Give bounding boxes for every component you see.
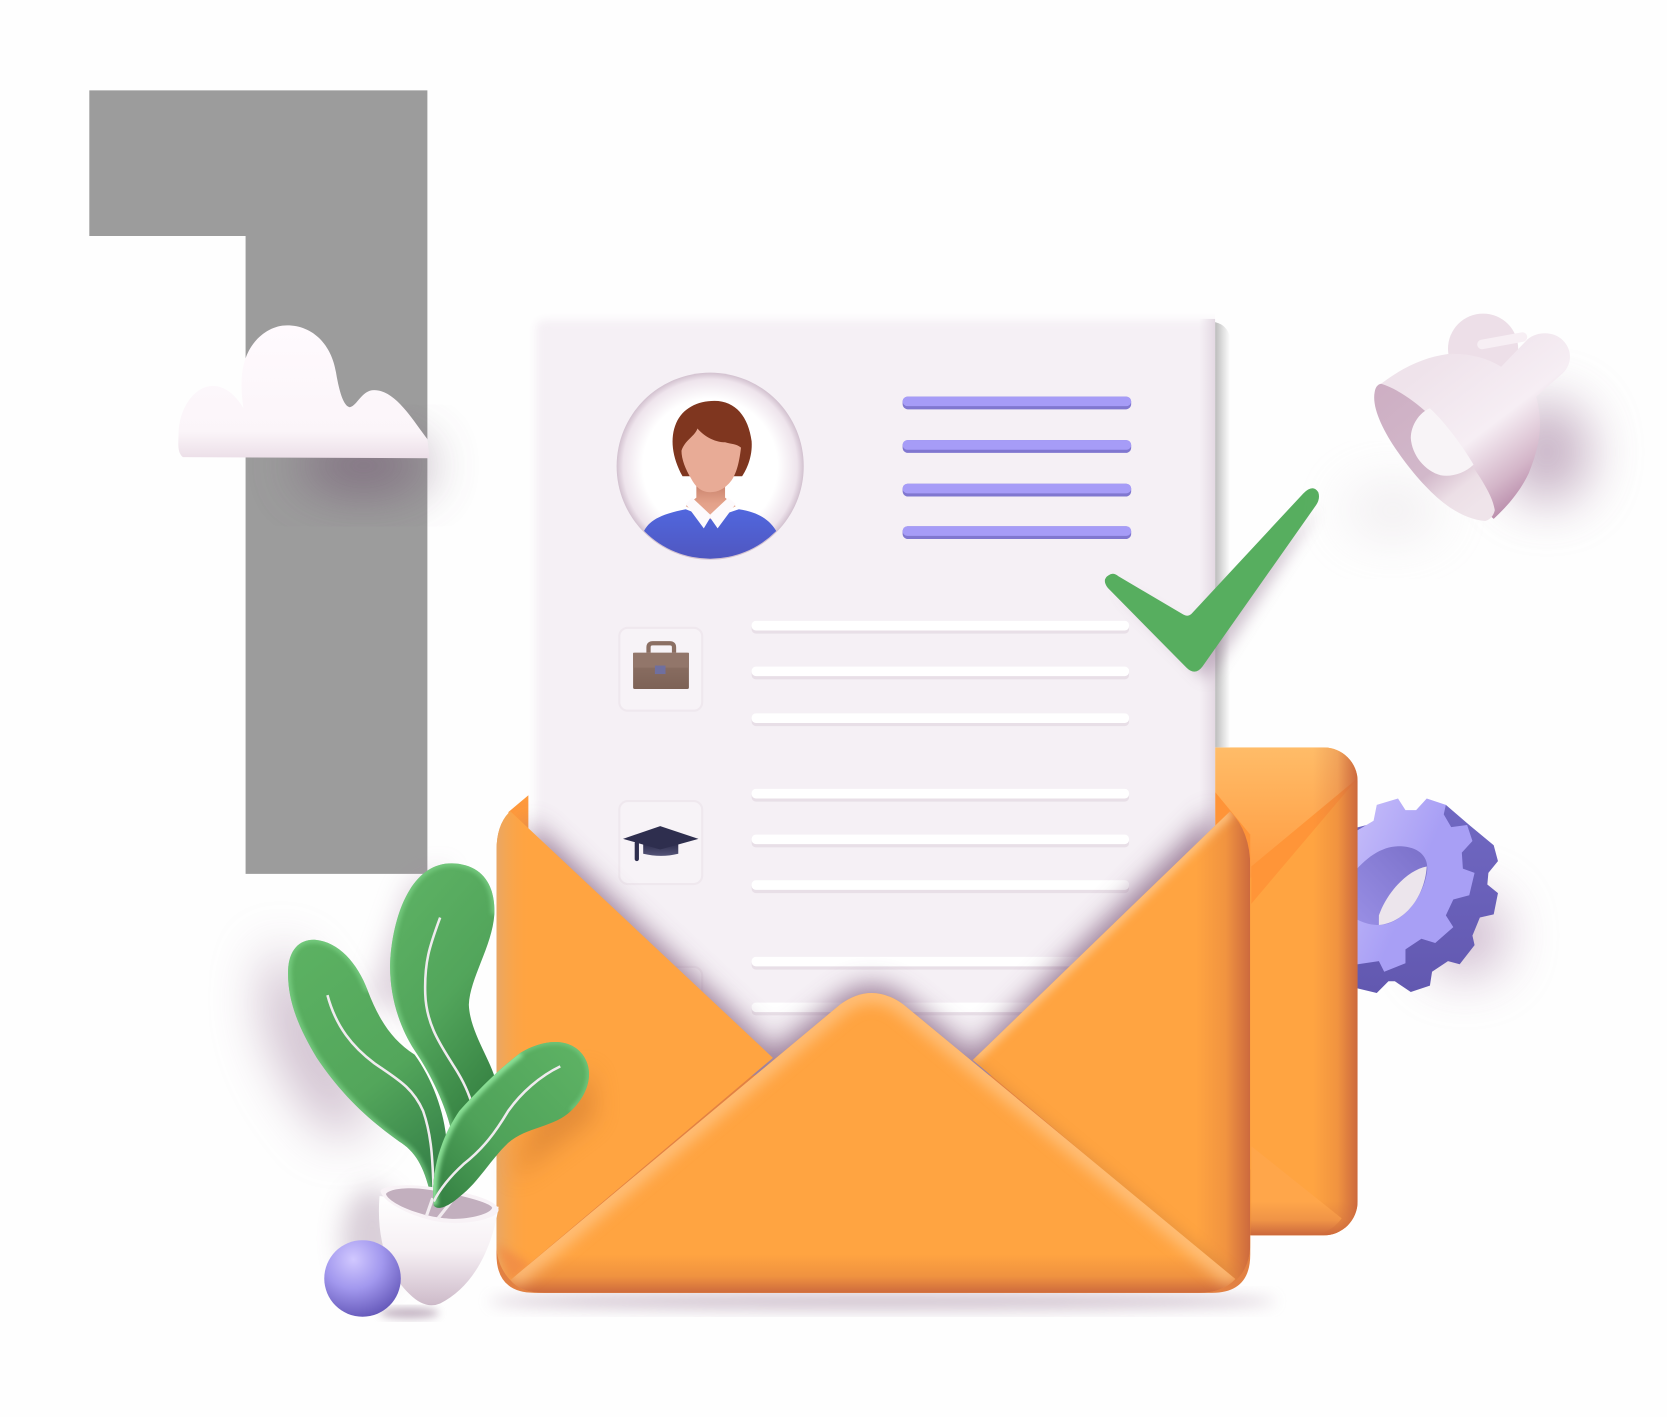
- desk lamp: [1345, 314, 1589, 537]
- envelope floor shadow: [489, 1293, 1276, 1310]
- front leaf vein: [434, 1066, 560, 1201]
- icon: graduation cap: [623, 826, 698, 859]
- purple ball: [324, 1240, 439, 1318]
- icon: briefcase: [633, 643, 689, 689]
- stems: [426, 1198, 454, 1218]
- illustration: resume in envelope: [89, 90, 1617, 1322]
- plant: [264, 856, 595, 1305]
- lamp bulb: [1411, 408, 1474, 476]
- left flap: [496, 812, 773, 1280]
- cloud: [178, 325, 430, 489]
- neck: [686, 486, 736, 519]
- grey block: [89, 90, 427, 874]
- pot: [379, 1185, 499, 1305]
- check mark: [1105, 488, 1319, 680]
- purple header lines: [903, 397, 1131, 539]
- envelope flap shadows: [528, 810, 1215, 1097]
- bottom flap: [500, 983, 1244, 1297]
- envelope inner back corners: [508, 792, 1250, 866]
- lamp shade: [1381, 333, 1570, 519]
- middle leaf vein: [425, 918, 473, 1108]
- face: [681, 428, 741, 492]
- document side shadow: [1215, 322, 1230, 747]
- lamp arm bar: [1482, 337, 1522, 344]
- pot inside: [386, 1188, 492, 1219]
- envelope base: [496, 1065, 1250, 1293]
- plant shadow: [264, 866, 595, 1290]
- white text lines: [752, 621, 1129, 1015]
- collar: [686, 498, 736, 528]
- icon box: briefcase: [619, 628, 702, 711]
- icon box: third, partly hidden: [619, 967, 702, 1050]
- back envelope inner flap: [1215, 747, 1358, 877]
- front envelope: [489, 797, 1260, 1297]
- lamp opening: [1374, 384, 1495, 521]
- hair: [673, 401, 752, 476]
- gear: [1350, 798, 1505, 993]
- middle leaf: [390, 863, 494, 1126]
- lamp knob: [1448, 314, 1518, 384]
- lamp shadows: [1345, 401, 1589, 537]
- right flap: [973, 812, 1250, 1275]
- back envelope lower triangle: [1251, 1146, 1342, 1235]
- resume document: [536, 319, 1237, 1107]
- front leaf: [433, 1042, 590, 1208]
- sweater: [643, 509, 777, 563]
- icon box: graduation cap: [619, 801, 702, 884]
- left leaf vein: [327, 995, 434, 1196]
- left leaf: [288, 940, 446, 1188]
- avatar: [617, 373, 804, 563]
- back envelope: [1215, 747, 1358, 1236]
